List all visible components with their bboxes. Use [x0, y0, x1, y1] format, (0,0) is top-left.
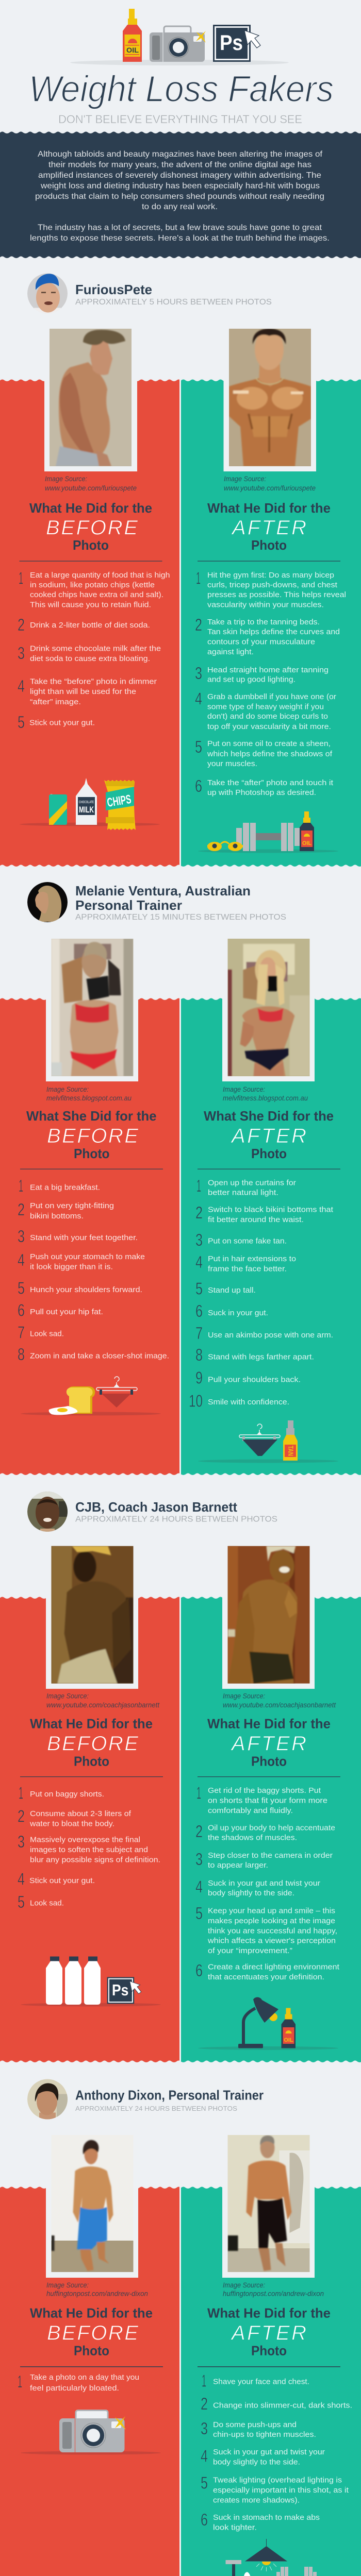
list: after steps: fit better around the waist. — [208, 1216, 304, 1224]
section: Melanie Ventura — [0, 882, 361, 1476]
list: after steps: 6 — [195, 1961, 203, 1980]
list: after steps: and set up good lighting. — [207, 676, 296, 684]
image source: before — [46, 2281, 148, 2298]
list: after steps: Suck in your gut. — [208, 1309, 268, 1317]
list: after steps: Change into slimmer-cut, dark shorts. — [213, 2402, 352, 2410]
list: before steps: Drink a 2-liter bottle of diet soda. — [30, 621, 150, 630]
list: after steps: Grab a dumbbell if you have one (or — [207, 693, 336, 701]
photo: before — [52, 2135, 133, 2272]
image source: before: www.youtube.com/furiouspete — [45, 484, 137, 492]
list: after steps: Hit the gym first: Do as many bicep — [207, 571, 334, 580]
list: after steps: Stand with legs farther apart. — [208, 1353, 314, 1361]
icon: photoshop — [107, 1977, 141, 2004]
icon: camera — [150, 26, 206, 62]
list: after steps: Put on some fake tan. — [208, 1238, 287, 1246]
heading: before — [20, 1716, 163, 1777]
list: before steps: 8 — [18, 1345, 25, 1364]
intro text: to do any real work. — [142, 202, 218, 211]
heading: after: What She Did for the — [204, 1108, 334, 1124]
photo: before — [52, 939, 133, 1076]
list: after steps: 2 — [195, 615, 202, 634]
icon: water bottle — [65, 1957, 81, 2005]
image source: after: www.youtube.com/coachjasonbarnett — [223, 1701, 336, 1709]
list: before steps: 3 — [18, 643, 25, 663]
illustration: black bikini, tan spray — [198, 1420, 338, 1463]
heading: after: Photo — [251, 537, 287, 553]
list: after steps: 9 — [195, 1368, 203, 1387]
illustration: soda, chocolate milk, chips — [20, 778, 160, 830]
section: FuriousPete — [0, 273, 361, 867]
list: after steps: 6 — [195, 776, 202, 795]
list: before steps: 1 — [18, 2372, 22, 2391]
list: after steps: Suck in your gut and twist your — [213, 2448, 325, 2456]
name: Melanie Ventura, Australian — [75, 883, 251, 899]
image source: before: Image Source: — [46, 1692, 89, 1700]
list: before steps: Zoom in and take a closer-shot image. — [30, 1352, 169, 1360]
image source: after: Image Source: — [223, 1692, 265, 1700]
list: after steps: some type of heavy weight if you — [207, 703, 324, 711]
list: before steps — [18, 1176, 169, 1364]
list: before steps: 1 — [19, 569, 23, 587]
name: Personal Trainer — [75, 897, 182, 913]
list: after steps: against light. — [207, 648, 254, 656]
list: before steps: 2 — [18, 1806, 25, 1826]
illustration: razor, foam, lamp, dumbbell — [198, 2539, 338, 2576]
time between photos: APPROXIMATELY 24 HOURS BETWEEN PHOTOS — [75, 2105, 237, 2112]
list: after steps: Stand up tall. — [208, 1286, 256, 1295]
list: after steps: creates more shadows). — [213, 2497, 300, 2505]
list: after steps: 3 — [201, 2419, 208, 2438]
heading: after — [198, 1716, 340, 1777]
image source: after: Image Source: — [224, 475, 266, 483]
list: after steps: 1 — [196, 1784, 201, 1802]
photo: after — [228, 939, 309, 1076]
list: after steps: of your “improvement.” — [208, 1947, 292, 1955]
name — [75, 883, 251, 913]
heading: after: AFTER — [231, 2321, 306, 2344]
list: after steps: curls, tricep push-downs, and chest — [207, 581, 337, 589]
list: before steps: 5 — [18, 1892, 25, 1911]
list: before steps: bikini bottoms. — [30, 1212, 84, 1221]
list: after steps — [189, 1176, 333, 1411]
list: before steps: 2 — [18, 1200, 25, 1219]
list: after steps: 1 — [196, 569, 201, 587]
illustration: soda, chocolate milk, chips: MILK — [79, 805, 94, 815]
subtitle: DON'T BELIEVE EVERYTHING THAT YOU SEE — [58, 113, 302, 126]
list: before steps: Look sad. — [30, 1899, 64, 1907]
icon: oil bottle: OIL — [284, 2037, 293, 2043]
list: after steps: Take the “after” photo and touch it — [207, 779, 333, 787]
photo: after — [229, 329, 311, 466]
list: after steps: vascularity within your muscles. — [207, 601, 324, 609]
list: after steps: better natural light. — [208, 1189, 278, 1197]
list: after steps: Put on some oil to create a sheen, — [207, 740, 331, 748]
image source: after — [223, 1692, 336, 1709]
list: before steps: feel particularly bloated. — [30, 2384, 119, 2393]
list: after steps: Take a trip to the tanning beds. — [207, 618, 320, 626]
panels background — [0, 2182, 361, 2576]
intro panel — [0, 131, 361, 259]
list: before steps: images to soften the subject and — [30, 1846, 148, 1854]
list: after steps — [195, 569, 346, 797]
intro text: amplified instances of severely dishonest imagery within advertising. The — [38, 171, 321, 180]
illustration: soda, chocolate milk, chips: CHOCOLATE — [79, 801, 94, 804]
heading: before: BEFORE — [47, 1125, 139, 1147]
illustration: black bikini, tan spray: TAN — [287, 1446, 295, 1456]
list: after steps: Put in hair extensions to — [208, 1255, 296, 1263]
list: after steps: presses as possible. This helps reveal — [207, 591, 346, 599]
list: before steps: 1 — [19, 1784, 23, 1802]
heading: before — [20, 500, 162, 562]
image source: after: Image Source: — [223, 2281, 265, 2289]
panels background — [0, 994, 361, 1476]
heading: after: Photo — [251, 2343, 287, 2359]
list: after steps: 2 — [201, 2394, 208, 2413]
list: before steps: 2 — [18, 615, 25, 634]
list: after steps: 3 — [195, 1230, 203, 1249]
list: after steps: 2 — [195, 1822, 203, 1841]
section: Anthony Dixon — [0, 2079, 361, 2576]
image source: before: Image Source: — [46, 1086, 89, 1093]
list: after steps: Pull your shoulders back. — [208, 1376, 301, 1384]
intro text — [30, 150, 330, 243]
icon: photoshop: Ps — [112, 1982, 128, 1999]
heading: before — [20, 2305, 163, 2367]
illustration: camera — [21, 2410, 161, 2454]
heading: before — [20, 1108, 163, 1170]
list: before steps: Eat a big breakfast. — [30, 1184, 100, 1192]
list: after steps: up with Photoshop as desired. — [207, 789, 316, 797]
icon: oil bottle: OIL — [302, 840, 311, 846]
list: before steps — [18, 1784, 160, 1911]
image source: after: huffingtonpost.com/andrew-dixon — [223, 2290, 324, 2298]
list: before steps: 4 — [18, 676, 25, 696]
illustration: water bottles and photoshop — [21, 1957, 161, 2006]
heading: before: BEFORE — [47, 1732, 139, 1755]
list: after steps: 1 — [202, 2371, 206, 2391]
image source: after — [223, 1086, 308, 1102]
name: FuriousPete — [75, 282, 152, 297]
list: after steps: Shave your face and chest. — [213, 2378, 309, 2386]
header illustration: oil, camera, photoshop — [70, 9, 289, 65]
list: before steps: Consume about 2-3 liters of — [30, 1810, 132, 1818]
list: after steps: 8 — [195, 1345, 203, 1364]
avatar: Anthony — [27, 2079, 68, 2120]
heading: after — [198, 2305, 340, 2367]
section: CJB, Coach Jason Barnett — [0, 1492, 361, 2063]
icon: oil bottle: OIL — [126, 46, 139, 54]
list: after steps: contours of your musculature — [207, 638, 315, 646]
heading: after: What He Did for the — [207, 2305, 331, 2320]
intro text: Although tabloids and beauty magazines have been altering the images of — [38, 150, 323, 159]
title: Weight Loss Fakers — [29, 69, 334, 110]
list: after steps: Smile with confidence. — [208, 1398, 289, 1406]
list: after steps: 5 — [201, 2473, 208, 2493]
heading: before: BEFORE — [46, 516, 138, 539]
list: before steps: Take a photo on a day that you — [30, 2374, 139, 2382]
panels background — [0, 376, 361, 867]
list: before steps: Put on very tight-fitting — [30, 1202, 114, 1210]
list: before steps: 6 — [18, 1300, 25, 1320]
list: after steps: Suck in your gut and twist your — [208, 1879, 320, 1888]
list: after steps: 4 — [201, 2446, 208, 2466]
list: after steps: 5 — [195, 1904, 203, 1923]
heading: before: Photo — [74, 2343, 109, 2359]
list: after steps: Tan skin helps define the curves and — [207, 628, 340, 636]
list: before steps: in sodium, like potato chips (kettle — [30, 581, 155, 589]
avatar: CJB — [27, 1492, 69, 1532]
intro text: products that claim to help consumers shed pounds without really needing — [35, 192, 324, 201]
list: before steps: Hunch your shoulders forward. — [30, 1286, 142, 1294]
illustration: soda, chocolate milk, chips: CHIPS — [106, 792, 132, 810]
list: before steps: 5 — [18, 713, 25, 732]
name: CJB, Coach Jason Barnett — [75, 1499, 237, 1515]
image source: after: Image Source: — [223, 1086, 265, 1093]
name: Anthony Dixon, Personal Trainer — [75, 2088, 264, 2103]
image source: before: Image Source: — [45, 475, 87, 483]
image source: after — [224, 475, 316, 492]
heading: before: BEFORE — [47, 2321, 139, 2344]
icon: photoshop — [213, 25, 260, 62]
list: after steps: Do some push-ups and — [213, 2421, 297, 2429]
list: after steps: top off your vascularity a bit more. — [207, 723, 331, 731]
list: before steps: Stick out your gut. — [29, 719, 95, 727]
intro text: The industry has a lot of secrets, but a few brave souls have gone to great — [38, 224, 322, 232]
list: after steps: body slightly to the side. — [213, 2459, 300, 2467]
list: after steps: Switch to black bikini bottoms that — [208, 1206, 333, 1214]
list: after steps — [201, 2371, 352, 2532]
list: after steps: 4 — [195, 1877, 203, 1896]
image source: after — [223, 2281, 324, 2298]
list: before steps: Put on baggy shorts. — [30, 1790, 104, 1799]
list: after steps: that accentuates your definition. — [208, 1973, 324, 1981]
list: after steps: especially important in this shot, as it — [213, 2486, 349, 2495]
list: after steps: Suck in stomach to make abs — [213, 2514, 320, 2522]
list: before steps: 7 — [18, 1323, 25, 1342]
list: after steps: comfortably and fluidly. — [208, 1807, 293, 1815]
photo: before — [52, 1546, 133, 1684]
list: after steps: body slightly to the side. — [208, 1889, 294, 1897]
list: before steps — [18, 569, 170, 732]
list: before steps: Pull out your hip fat. — [30, 1308, 103, 1316]
list: after steps: frame the face better. — [208, 1265, 287, 1274]
list: before steps: cooked chips have extra oil and salt). — [30, 591, 163, 599]
heading: before: Photo — [73, 537, 109, 553]
heading: before: What She Did for the — [26, 1108, 157, 1124]
heading: after — [198, 1108, 340, 1170]
list: before steps: Look sad. — [30, 1330, 64, 1338]
list: before steps: “after” image. — [30, 698, 81, 706]
illustration: toast, egg, red bikini — [21, 1377, 161, 1416]
list: before steps: Stand with your feet together. — [30, 1234, 138, 1242]
list: after steps: makes people looking at the image — [208, 1917, 335, 1925]
icon: water bottle — [46, 1957, 62, 2005]
time between photos: APPROXIMATELY 24 HOURS BETWEEN PHOTOS — [75, 1515, 277, 1524]
illustration: desk lamp and oil — [198, 1997, 338, 2050]
list: after steps: Create a direct lighting environment — [208, 1963, 339, 1971]
image source: before — [45, 475, 137, 492]
list: after steps: Head straight home after tanning — [207, 666, 329, 674]
image source: before: huffingtonpost.com/andrew-dixon — [46, 2290, 148, 2298]
heading: before: What He Did for the — [29, 500, 152, 516]
list: before steps: This will cause you to retain fluid. — [30, 601, 151, 609]
list: before steps: 4 — [18, 1250, 25, 1269]
list: before steps: blur any possible signs of definition. — [30, 1856, 160, 1864]
heading: after: Photo — [251, 1754, 287, 1769]
heading: after: Photo — [251, 1146, 287, 1161]
list: before steps: 1 — [19, 1176, 23, 1195]
image source: before — [46, 1086, 132, 1102]
icon: water bottle — [84, 1957, 101, 2005]
list: before steps: Eat a large quantity of food that is high — [30, 571, 170, 580]
list: before steps: 3 — [18, 1832, 25, 1851]
list: after steps: 5 — [195, 737, 202, 756]
heading: after: What He Did for the — [207, 500, 331, 516]
list: before steps: Massively overexpose the final — [30, 1836, 140, 1844]
list: after steps: Get rid of the baggy shorts. Put — [208, 1787, 321, 1795]
heading: after: AFTER — [231, 516, 306, 539]
list: after steps: on shorts that fit your form more — [208, 1797, 327, 1805]
illustration: goggles, dumbbell, oil — [198, 811, 338, 853]
list: after steps: 4 — [195, 1252, 203, 1272]
list: after steps: look tighter. — [213, 2523, 257, 2532]
panels background — [0, 1592, 361, 2063]
icon: oil bottle — [123, 9, 142, 62]
image source: before: www.youtube.com/coachjasonbarnett — [46, 1701, 160, 1709]
list: after steps: 6 — [201, 2510, 208, 2529]
heading: before: What He Did for the — [30, 1716, 153, 1731]
heading: after — [198, 500, 340, 562]
image source: after: www.youtube.com/furiouspete — [224, 484, 316, 492]
heading: before: What He Did for the — [30, 2305, 153, 2320]
list: after steps: 2 — [195, 1203, 203, 1222]
list: before steps: Push out your stomach to make — [30, 1253, 145, 1261]
list: before steps: diet soda to cause extra bloating. — [30, 655, 150, 663]
heading: before: Photo — [74, 1754, 109, 1769]
icon: oil bottle — [300, 811, 314, 851]
image source: before: Image Source: — [46, 2281, 89, 2289]
list: after steps: Tweak lighting (overhead lighting is — [213, 2476, 342, 2484]
list: after steps: Use an akimbo pose with one arm. — [208, 1331, 333, 1340]
list: after steps: 7 — [195, 1324, 203, 1343]
list: before steps — [18, 2372, 139, 2393]
list: before steps: 5 — [18, 1279, 25, 1297]
list: after steps: Step closer to the camera in order — [208, 1852, 333, 1860]
list: after steps: Oil up your body to help accentuate — [208, 1824, 335, 1832]
list: after steps: which helps define the shadows of — [207, 750, 333, 758]
list: before steps: 3 — [18, 1227, 25, 1246]
list: after steps — [195, 1784, 339, 1981]
list: after steps: think you are successful and happy, — [208, 1927, 337, 1935]
list: after steps: chin-ups to tighten muscles. — [213, 2431, 316, 2439]
image source: after: melvfitness.blogspot.com.au — [223, 1094, 308, 1102]
list: before steps: Drink some chocolate milk after the — [30, 645, 161, 653]
icon: photoshop: Ps — [220, 30, 243, 55]
image source: before — [46, 1692, 160, 1709]
intro text: lengths to expose these secrets. Here's a look at the truth behind the images. — [30, 234, 330, 243]
heading: after: AFTER — [231, 1732, 306, 1755]
image source: before: melvfitness.blogspot.com.au — [46, 1094, 132, 1102]
list: before steps: 4 — [18, 1869, 25, 1889]
list: before steps: light than will be used for the — [30, 688, 136, 696]
list: after steps: which affects a viewer's perception — [207, 1937, 336, 1945]
intro text: weight loss and dieting industry has been especially hard-hit with bogus — [40, 181, 320, 191]
list: after steps: 3 — [195, 664, 202, 683]
list: after steps: 10 — [189, 1391, 203, 1411]
list: after steps: to appear larger. — [208, 1861, 268, 1870]
heading: before: Photo — [74, 1146, 109, 1161]
avatar: Melanie — [27, 882, 68, 922]
list: after steps: 1 — [196, 1176, 201, 1195]
list: after steps: 6 — [195, 1301, 203, 1320]
list: before steps: Take the “before” photo in dimmer — [30, 678, 157, 686]
photo: after — [228, 2135, 309, 2272]
avatar: FuriousPete — [27, 273, 68, 315]
heading: after: AFTER — [231, 1125, 306, 1147]
list: after steps: 4 — [195, 689, 202, 708]
photo: before — [50, 329, 132, 466]
intro text: their models for many years, the advent of the online digital age has — [48, 161, 311, 169]
icon: oil bottle — [282, 2008, 296, 2048]
list: after steps: don't) and do some bicep curls to — [207, 713, 328, 721]
list: after steps: your muscles. — [207, 760, 257, 768]
time between photos: APPROXIMATELY 15 MINUTES BETWEEN PHOTOS — [75, 913, 286, 922]
list: after steps: 5 — [195, 1279, 203, 1298]
list: after steps: Open up the curtains for — [208, 1179, 296, 1187]
time between photos: APPROXIMATELY 5 HOURS BETWEEN PHOTOS — [75, 298, 272, 307]
photo: after — [228, 1546, 309, 1684]
heading: after: What He Did for the — [207, 1716, 331, 1731]
list: before steps: water to bloat the body. — [29, 1820, 114, 1828]
list: after steps: 3 — [195, 1850, 203, 1869]
list: after steps: the shadows of muscles. — [208, 1834, 297, 1842]
list: after steps: Keep your head up and smile – this — [208, 1907, 335, 1916]
list: before steps: it look bigger than it is. — [30, 1263, 113, 1272]
list: before steps: Stick out your gut. — [29, 1877, 95, 1885]
